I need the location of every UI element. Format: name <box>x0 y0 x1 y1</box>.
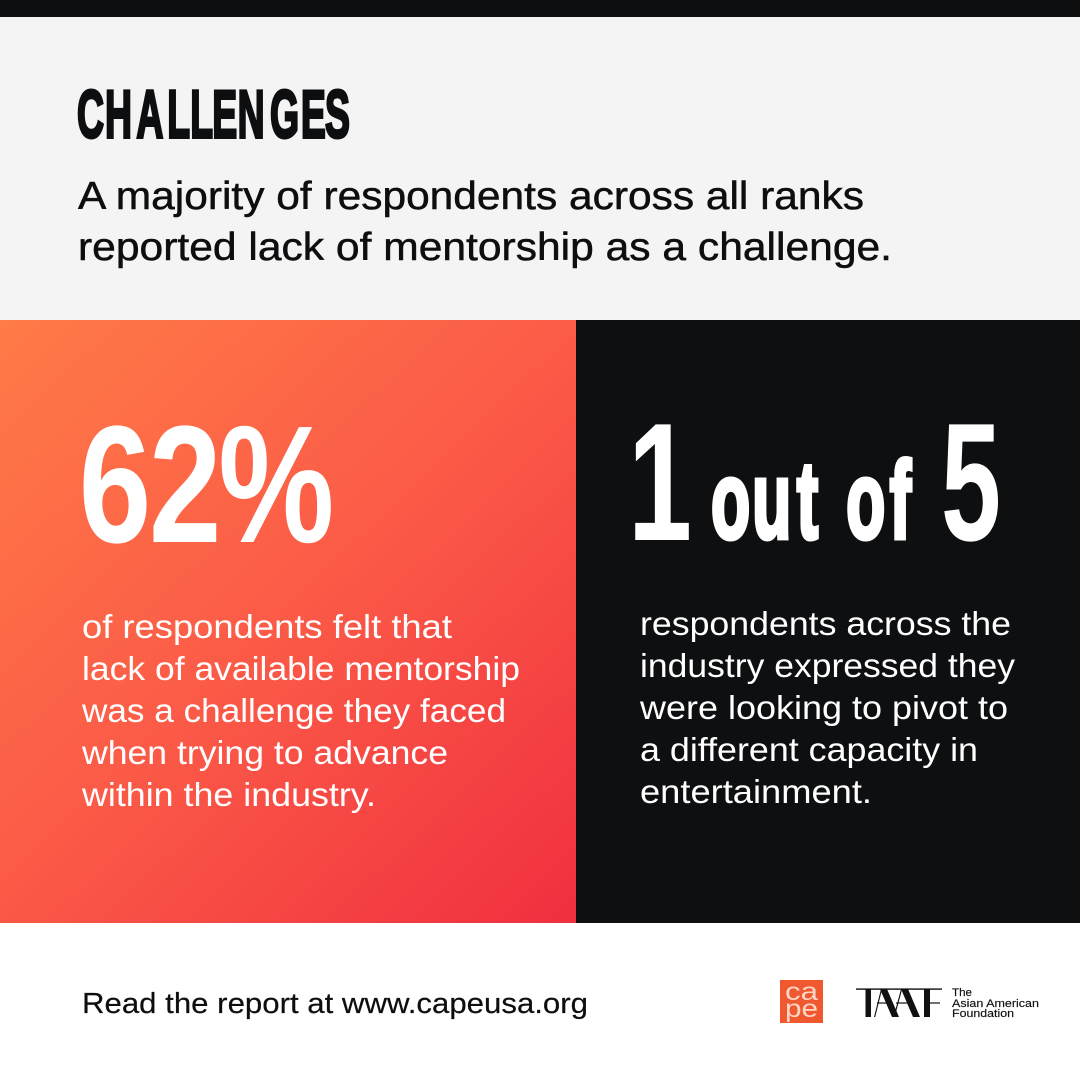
description: pivot: industry expressed they <box>640 648 1015 685</box>
description: mentorship <box>81 609 520 814</box>
big number: 1 out of 5: 5 <box>941 388 1001 576</box>
description: mentorship: was a challenge they faced <box>81 693 506 730</box>
panel: 62% statistic <box>0 320 576 923</box>
panel: header <box>0 17 1080 320</box>
description: mentorship: of respondents felt that <box>82 609 453 646</box>
description: mentorship: when trying to advance <box>81 735 448 772</box>
description: pivot: a different capacity in <box>640 732 978 769</box>
big number: 1 out of 5: out of <box>711 440 912 562</box>
big number: 1 out of 5 <box>628 388 1001 576</box>
top bar <box>0 0 1080 17</box>
description: pivot: respondents across the <box>640 606 1011 643</box>
logo: CAPE: pe <box>785 995 818 1023</box>
logo: CAPE <box>780 978 823 1023</box>
title: CHALLENGES <box>77 76 350 152</box>
description: mentorship: within the industry. <box>81 777 376 814</box>
subtitle <box>78 175 892 269</box>
footer call to action: Read the report at www.capeusa.org <box>82 988 588 1020</box>
subtitle: A majority of respondents across all ranks <box>78 175 864 218</box>
description: pivot <box>639 606 1015 811</box>
logo: CAPE: ca <box>785 978 818 1006</box>
description: pivot: entertainment. <box>640 774 872 811</box>
logo wordmark: The <box>952 987 972 999</box>
description: pivot: were looking to pivot to <box>639 690 1008 727</box>
subtitle: reported lack of mentorship as a challenge. <box>78 226 892 269</box>
big number: 1 out of 5: 1 <box>628 388 692 576</box>
logo wordmark: Foundation <box>952 1008 1014 1020</box>
description: mentorship: lack of available mentorship <box>82 651 520 688</box>
panel: 1 out of 5 statistic <box>576 320 1080 923</box>
logo wordmark: Asian American <box>952 998 1039 1010</box>
big number: 62%: 62% <box>79 390 334 578</box>
logo: The Asian American Foundation <box>856 987 1039 1020</box>
logo wordmark <box>952 987 1039 1020</box>
logo mark <box>856 988 942 1017</box>
